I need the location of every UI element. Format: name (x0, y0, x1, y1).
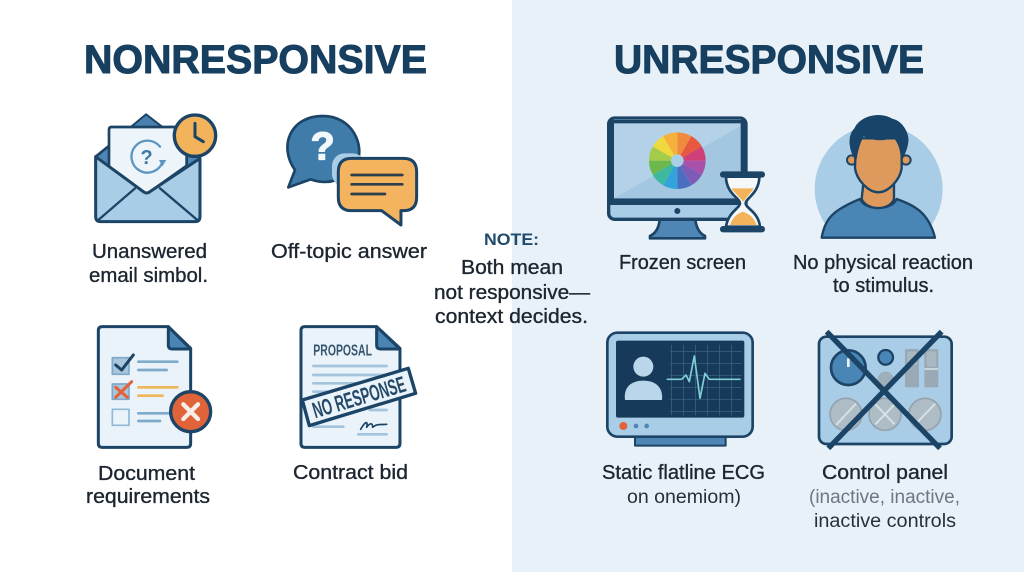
label: frozen screen: Frozen screen (619, 252, 746, 274)
icon: ECG monitor (607, 333, 753, 446)
label: document requirements: Document (98, 463, 195, 485)
callout: note: Both mean (461, 257, 563, 279)
label: no physical reaction (793, 252, 973, 297)
icon: person with no reaction (815, 116, 943, 253)
label: document requirements (86, 463, 210, 508)
label: static flatline ECG: Static flatline ECG (602, 462, 765, 484)
icon: frozen screen monitor with hourglass (609, 118, 765, 238)
label: no physical reaction: to stimulus. (833, 275, 934, 297)
icon: document requirements checklist (98, 327, 211, 447)
icon: off-topic speech bubbles (287, 116, 417, 225)
icon: contract bid with no response stamp: NO RESPONSE (309, 371, 409, 423)
hourglass (720, 171, 765, 232)
label: off-topic answer: Off-topic answer (271, 241, 427, 263)
icon: contract bid with no response stamp: PROPOSAL (313, 343, 372, 360)
label: contract bid: Contract bid (293, 462, 408, 484)
label: static flatline ECG (602, 462, 765, 508)
label: unanswered email (89, 241, 208, 287)
colour wheel (649, 132, 706, 189)
label: control panel: inactive controls (814, 511, 956, 532)
label: document requirements: requirements (86, 486, 210, 508)
icon: off-topic speech bubbles: ? (311, 124, 335, 168)
icon: contract bid with no response stamp (301, 327, 416, 447)
label: control panel: Control panel (822, 462, 948, 484)
callout: note: NOTE: (484, 230, 539, 249)
panel: unresponsive background (512, 0, 1024, 572)
label: no physical reaction: No physical reaction (793, 252, 973, 274)
label: control panel: (inactive, inactive, (809, 487, 960, 508)
icon: unanswered email (96, 114, 216, 222)
label: unanswered email: email simbol. (89, 265, 208, 287)
heading: unresponsive: UNRESPONSIVE (614, 38, 924, 82)
panel: nonresponsive background (0, 0, 512, 572)
label: static flatline ECG: on onemiom) (627, 487, 741, 508)
icon: crossed-out control panel (819, 332, 952, 448)
callout: note: context decides. (435, 306, 588, 328)
heading: nonresponsive: NONRESPONSIVE (84, 38, 427, 82)
callout: note (434, 230, 590, 328)
label: unanswered email: Unanswered (92, 241, 207, 263)
label: control panel (809, 462, 960, 532)
callout: note: not responsive— (434, 282, 590, 304)
icon: unanswered email: ? (141, 147, 153, 169)
